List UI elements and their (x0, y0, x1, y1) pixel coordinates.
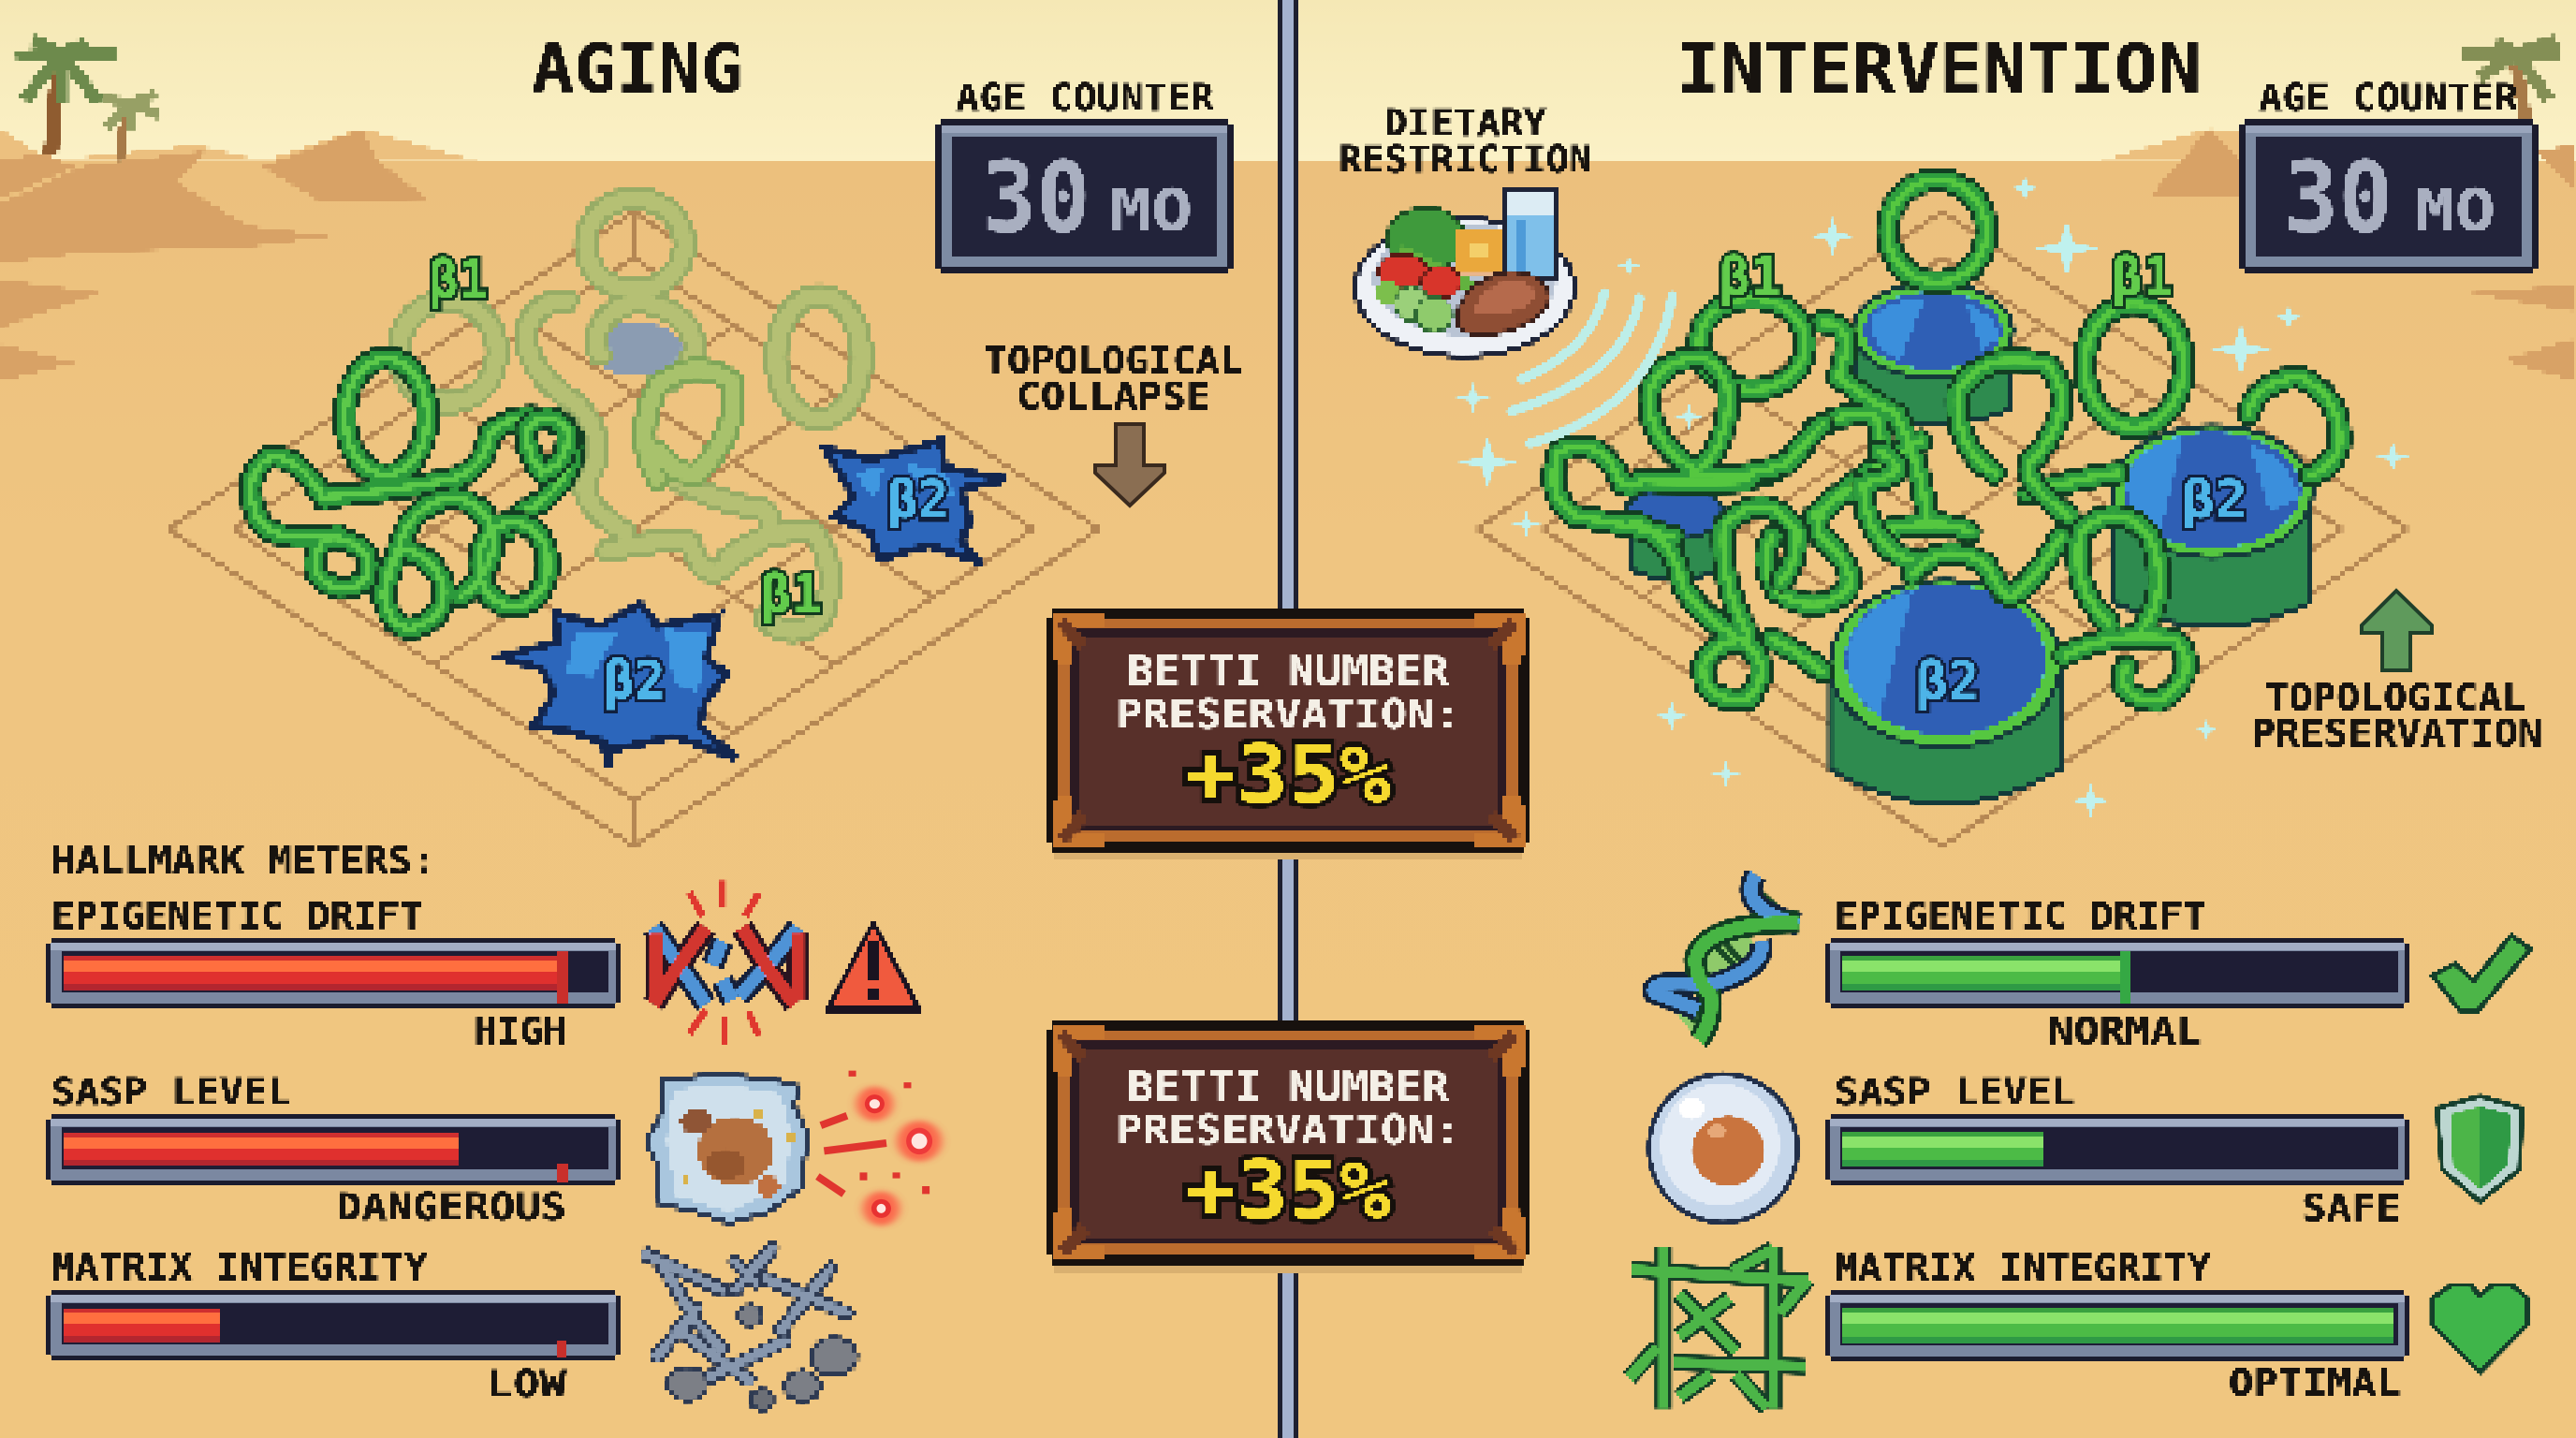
icon: check mark (2433, 935, 2530, 1011)
meter: matrix integrity aging: LOW (487, 1363, 567, 1406)
beta labels right: β1 (1720, 247, 1781, 308)
icon: food plate (1355, 191, 1573, 357)
beta labels right (1720, 247, 2247, 712)
meter: sasp level aging: DANGEROUS (336, 1186, 566, 1229)
meter: epigenetic drift intervention: NORMAL (2048, 1010, 2202, 1053)
ruptured void splat upper right (826, 441, 1006, 562)
beta labels left: β1 (760, 565, 823, 625)
ruptured void splat lower (501, 605, 735, 769)
panel text: BETTI NUMBER (1127, 1064, 1450, 1111)
bright surviving tube cluster left (251, 359, 574, 629)
diet effect waves (1512, 293, 1673, 444)
healthy tube network right (1554, 180, 2340, 701)
label: dietary restriction: RESTRICTION (1339, 139, 1592, 182)
faded collapsing tubes left (399, 198, 862, 631)
callout: topological preservation: PRESERVATION (2251, 712, 2542, 756)
meter: matrix integrity aging (46, 1246, 621, 1406)
meter: sasp level intervention: SASP LEVEL (1835, 1071, 2075, 1114)
callout: topological preservation (2251, 591, 2542, 756)
icon: broken matrix (647, 1249, 856, 1410)
beta labels left: β2 (604, 651, 666, 712)
meter: epigenetic drift aging (46, 895, 621, 1053)
age counter left: MO (1110, 176, 1193, 244)
beta labels right: β1 (2112, 247, 2174, 308)
callout: topological collapse: COLLAPSE (1017, 375, 1210, 418)
age counter left: AGE COUNTER (956, 77, 1215, 120)
cylinders right (1625, 283, 2312, 803)
isometric grid right (1477, 212, 2408, 846)
callout: topological collapse (984, 340, 1243, 506)
icon: sasp particles (817, 1071, 942, 1225)
icon: healthy matrix lattice (1629, 1247, 1808, 1408)
sparkles right (1456, 175, 2410, 818)
title: intervention: INTERVENTION (1676, 30, 2202, 108)
panel text (1116, 648, 1460, 822)
panel: betti number bottom (1046, 1020, 1530, 1273)
beta labels left (429, 250, 949, 712)
meter: matrix integrity intervention: MATRIX INTEGRITY (1835, 1247, 2211, 1290)
title: aging: AGING (532, 30, 743, 108)
meter: sasp level intervention (1825, 1071, 2409, 1230)
icon: warning triangle (826, 918, 921, 1015)
meter: sasp level intervention: SAFE (2302, 1187, 2401, 1230)
meter: matrix integrity aging: MATRIX INTEGRITY (51, 1246, 428, 1289)
callout: topological preservation: TOPOLOGICAL (2265, 677, 2525, 720)
panel: betti number top (1046, 609, 1530, 859)
age counter right: MO (2415, 176, 2496, 244)
icon: heart (2433, 1285, 2527, 1372)
dunes right (2101, 129, 2576, 382)
meter: sasp level aging (46, 1071, 621, 1229)
meter: matrix integrity intervention (1825, 1247, 2409, 1405)
age counter right: AGE COUNTER (2259, 77, 2519, 120)
label: dietary restriction (1339, 102, 1592, 182)
heading: hallmark meters: HALLMARK METERS: (51, 840, 436, 883)
isometric grid left (168, 212, 1099, 846)
age counter left (935, 77, 1234, 273)
icon: shield (2437, 1096, 2522, 1201)
beta labels left: β2 (887, 470, 949, 531)
dunes left (0, 129, 476, 382)
meter: sasp level aging: SASP LEVEL (51, 1071, 291, 1114)
meter: epigenetic drift aging: HIGH (474, 1010, 566, 1053)
age counter right: 30 (2284, 140, 2393, 255)
beta labels right: β2 (2182, 470, 2247, 531)
label: dietary restriction: DIETARY (1384, 102, 1546, 145)
meter: epigenetic drift aging: EPIGENETIC DRIFT (51, 895, 423, 938)
panel text: BETTI NUMBER (1127, 648, 1450, 696)
palm trees left (17, 40, 160, 161)
age counter right (2239, 77, 2539, 273)
beta labels right: β2 (1916, 652, 1980, 712)
icon: senescent cell (647, 1075, 808, 1224)
icon: healthy dna (1653, 874, 1798, 1040)
panel text: PRESERVATION: (1116, 1107, 1460, 1154)
panel text: +35% (1185, 1144, 1391, 1238)
icon: healthy cell (1649, 1074, 1797, 1223)
meter: epigenetic drift intervention (1825, 895, 2409, 1053)
callout: topological collapse: TOPOLOGICAL (984, 340, 1243, 383)
beta labels left: β1 (429, 250, 489, 311)
center divider (1278, 0, 1298, 1438)
panel text: +35% (1185, 728, 1391, 822)
palm tree right (2461, 40, 2560, 126)
age counter left: 30 (982, 140, 1090, 255)
meter: matrix integrity intervention: OPTIMAL (2229, 1362, 2401, 1405)
icon: broken dna (653, 881, 798, 1045)
panel text (1116, 1064, 1460, 1238)
meter: epigenetic drift intervention: EPIGENETIC DRIFT (1835, 895, 2206, 938)
panel text: PRESERVATION: (1116, 691, 1460, 739)
background: sky (0, 0, 2576, 161)
